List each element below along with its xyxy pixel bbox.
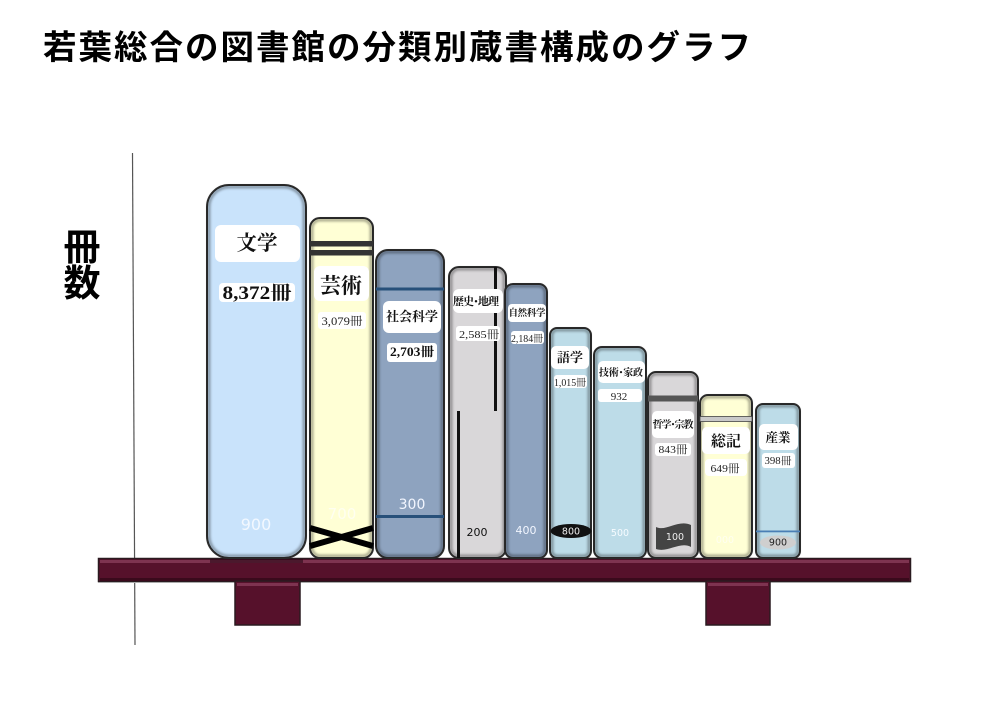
book: 総記: 000: [716, 535, 734, 546]
book: 技術・家政: 技術･家政: [599, 366, 643, 379]
book: 産業: 398冊: [764, 455, 792, 467]
book: 文学: 900: [241, 515, 271, 534]
book: 芸術: 3,079冊: [322, 314, 362, 328]
book: 歴史・地理: 歴史･地理: [453, 294, 499, 308]
y axis label: 数: [64, 263, 100, 304]
book: 文学: 8,372冊: [222, 282, 292, 304]
title: 若葉総合の図書館の分類別蔵書構成のグラフ: [43, 30, 751, 67]
book: 総記: 総記: [711, 432, 741, 450]
book: 総記: [700, 395, 752, 558]
book: 芸術: [310, 218, 373, 558]
book: 自然科学: 400: [516, 524, 536, 537]
book: 産業: 900: [769, 538, 787, 548]
shelf leg: left: [235, 581, 300, 625]
book: 歴史・地理: 200: [466, 526, 488, 539]
book: 技術・家政: 932: [611, 391, 627, 403]
shelf board: [98, 558, 911, 582]
book: 芸術: 芸術: [320, 274, 362, 298]
book: 文学: 文学: [236, 232, 278, 255]
book: 自然科学: [505, 284, 547, 558]
book: 産業: 産業: [765, 430, 791, 445]
book: 産業: [756, 404, 800, 558]
book: 総記: 649冊: [710, 462, 740, 475]
book: 哲学・宗教: 100: [666, 532, 684, 543]
book: 語学: 1,015冊: [554, 377, 586, 389]
book: 語学: 800: [562, 526, 580, 538]
y axis line: [132, 153, 135, 645]
book: 社会科学: [376, 250, 444, 558]
book: 哲学・宗教: 哲学･宗教: [652, 418, 694, 431]
book: 文学: [207, 185, 306, 558]
book: 社会科学: 300: [399, 497, 425, 513]
book: 技術・家政: [594, 347, 646, 558]
book: 技術・家政: 500: [611, 528, 629, 539]
book: 自然科学: 自然科学: [508, 307, 546, 319]
book: 自然科学: 2,184冊: [511, 333, 543, 345]
book: 歴史・地理: [449, 267, 506, 558]
book: 哲学・宗教: 843冊: [658, 443, 688, 456]
book: 社会科学: 2,703冊: [390, 344, 434, 359]
book: 語学: 語学: [557, 350, 583, 365]
book: 歴史・地理: 2,585冊: [459, 328, 499, 341]
y axis label: 冊: [64, 227, 100, 268]
book: 語学: [550, 328, 592, 558]
book: 芸術: 700: [328, 505, 356, 523]
shelf leg: right: [706, 581, 770, 625]
book: 社会科学: 社会科学: [386, 309, 438, 325]
book: 哲学・宗教: [648, 372, 698, 558]
y axis label: [64, 227, 100, 304]
